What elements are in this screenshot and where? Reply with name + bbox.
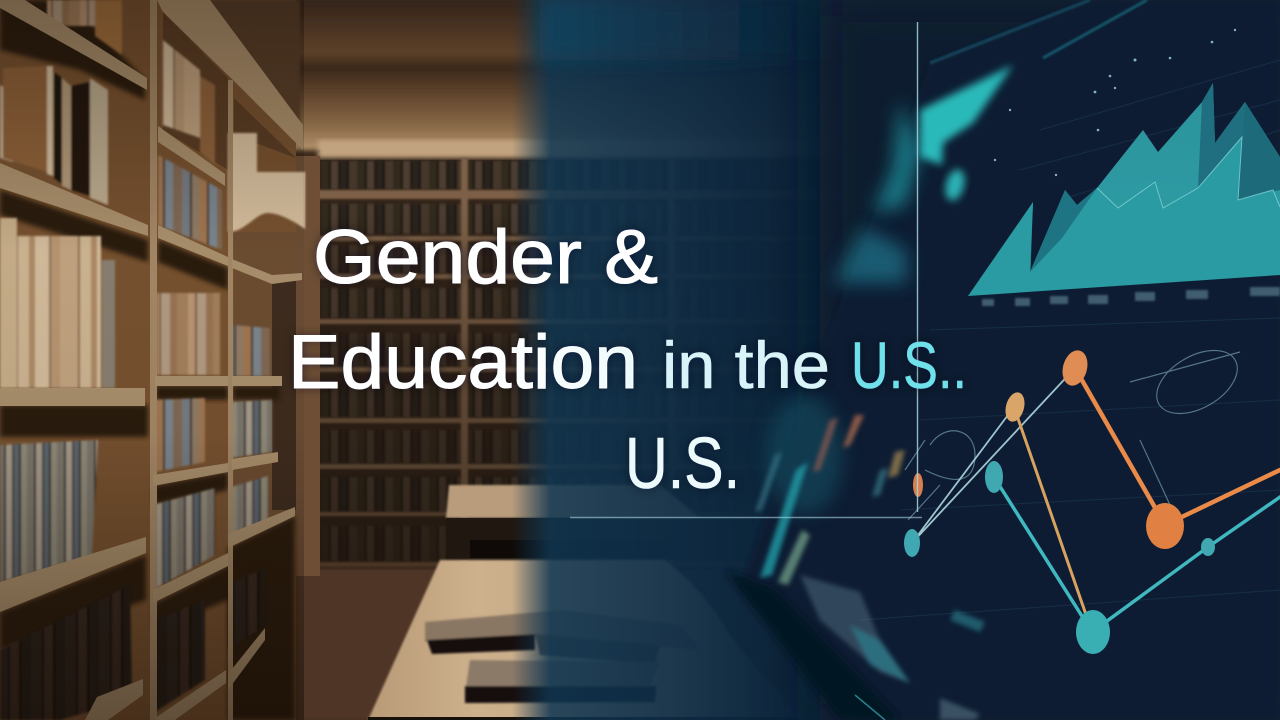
panel top highlight (1043, 0, 1147, 58)
glowing teal map shape (833, 65, 1013, 283)
back bookcase book rows (322, 161, 838, 561)
title line 2 highlighted: U.S.. (851, 328, 967, 402)
line chart (912, 368, 1280, 632)
left bookcase shelves (0, 0, 302, 720)
panel grid lines (860, 60, 1280, 620)
mountain area chart (968, 83, 1280, 296)
back bookcase (318, 140, 848, 570)
blurred side bars (755, 395, 985, 720)
data dashboard panel (725, 0, 1280, 720)
reading table (368, 485, 868, 720)
line chart nodes (904, 348, 1215, 654)
sketch line annotations (905, 337, 1248, 520)
blue transition overlay (480, 0, 1280, 720)
crosshair guide lines (570, 22, 922, 518)
left bookcase frame (0, 0, 320, 720)
cabinet inner shadows (0, 0, 295, 720)
left bookcase books (0, 0, 272, 720)
books on table (425, 610, 700, 703)
back bookcase shelves (318, 158, 848, 567)
ceiling (200, 0, 860, 150)
title line 1: Gender & (313, 215, 658, 300)
title line 3: U.S. (625, 424, 740, 504)
panel data dots (994, 29, 1236, 176)
title line 2: Education (288, 320, 638, 405)
axis tick labels (982, 287, 1280, 306)
cream wall bracket shape (228, 133, 305, 232)
title (288, 215, 967, 504)
dark lower panel edge (725, 570, 900, 720)
floor (255, 568, 445, 720)
cabinet posts (150, 0, 233, 720)
title line 2 continuation: in the (662, 328, 830, 402)
